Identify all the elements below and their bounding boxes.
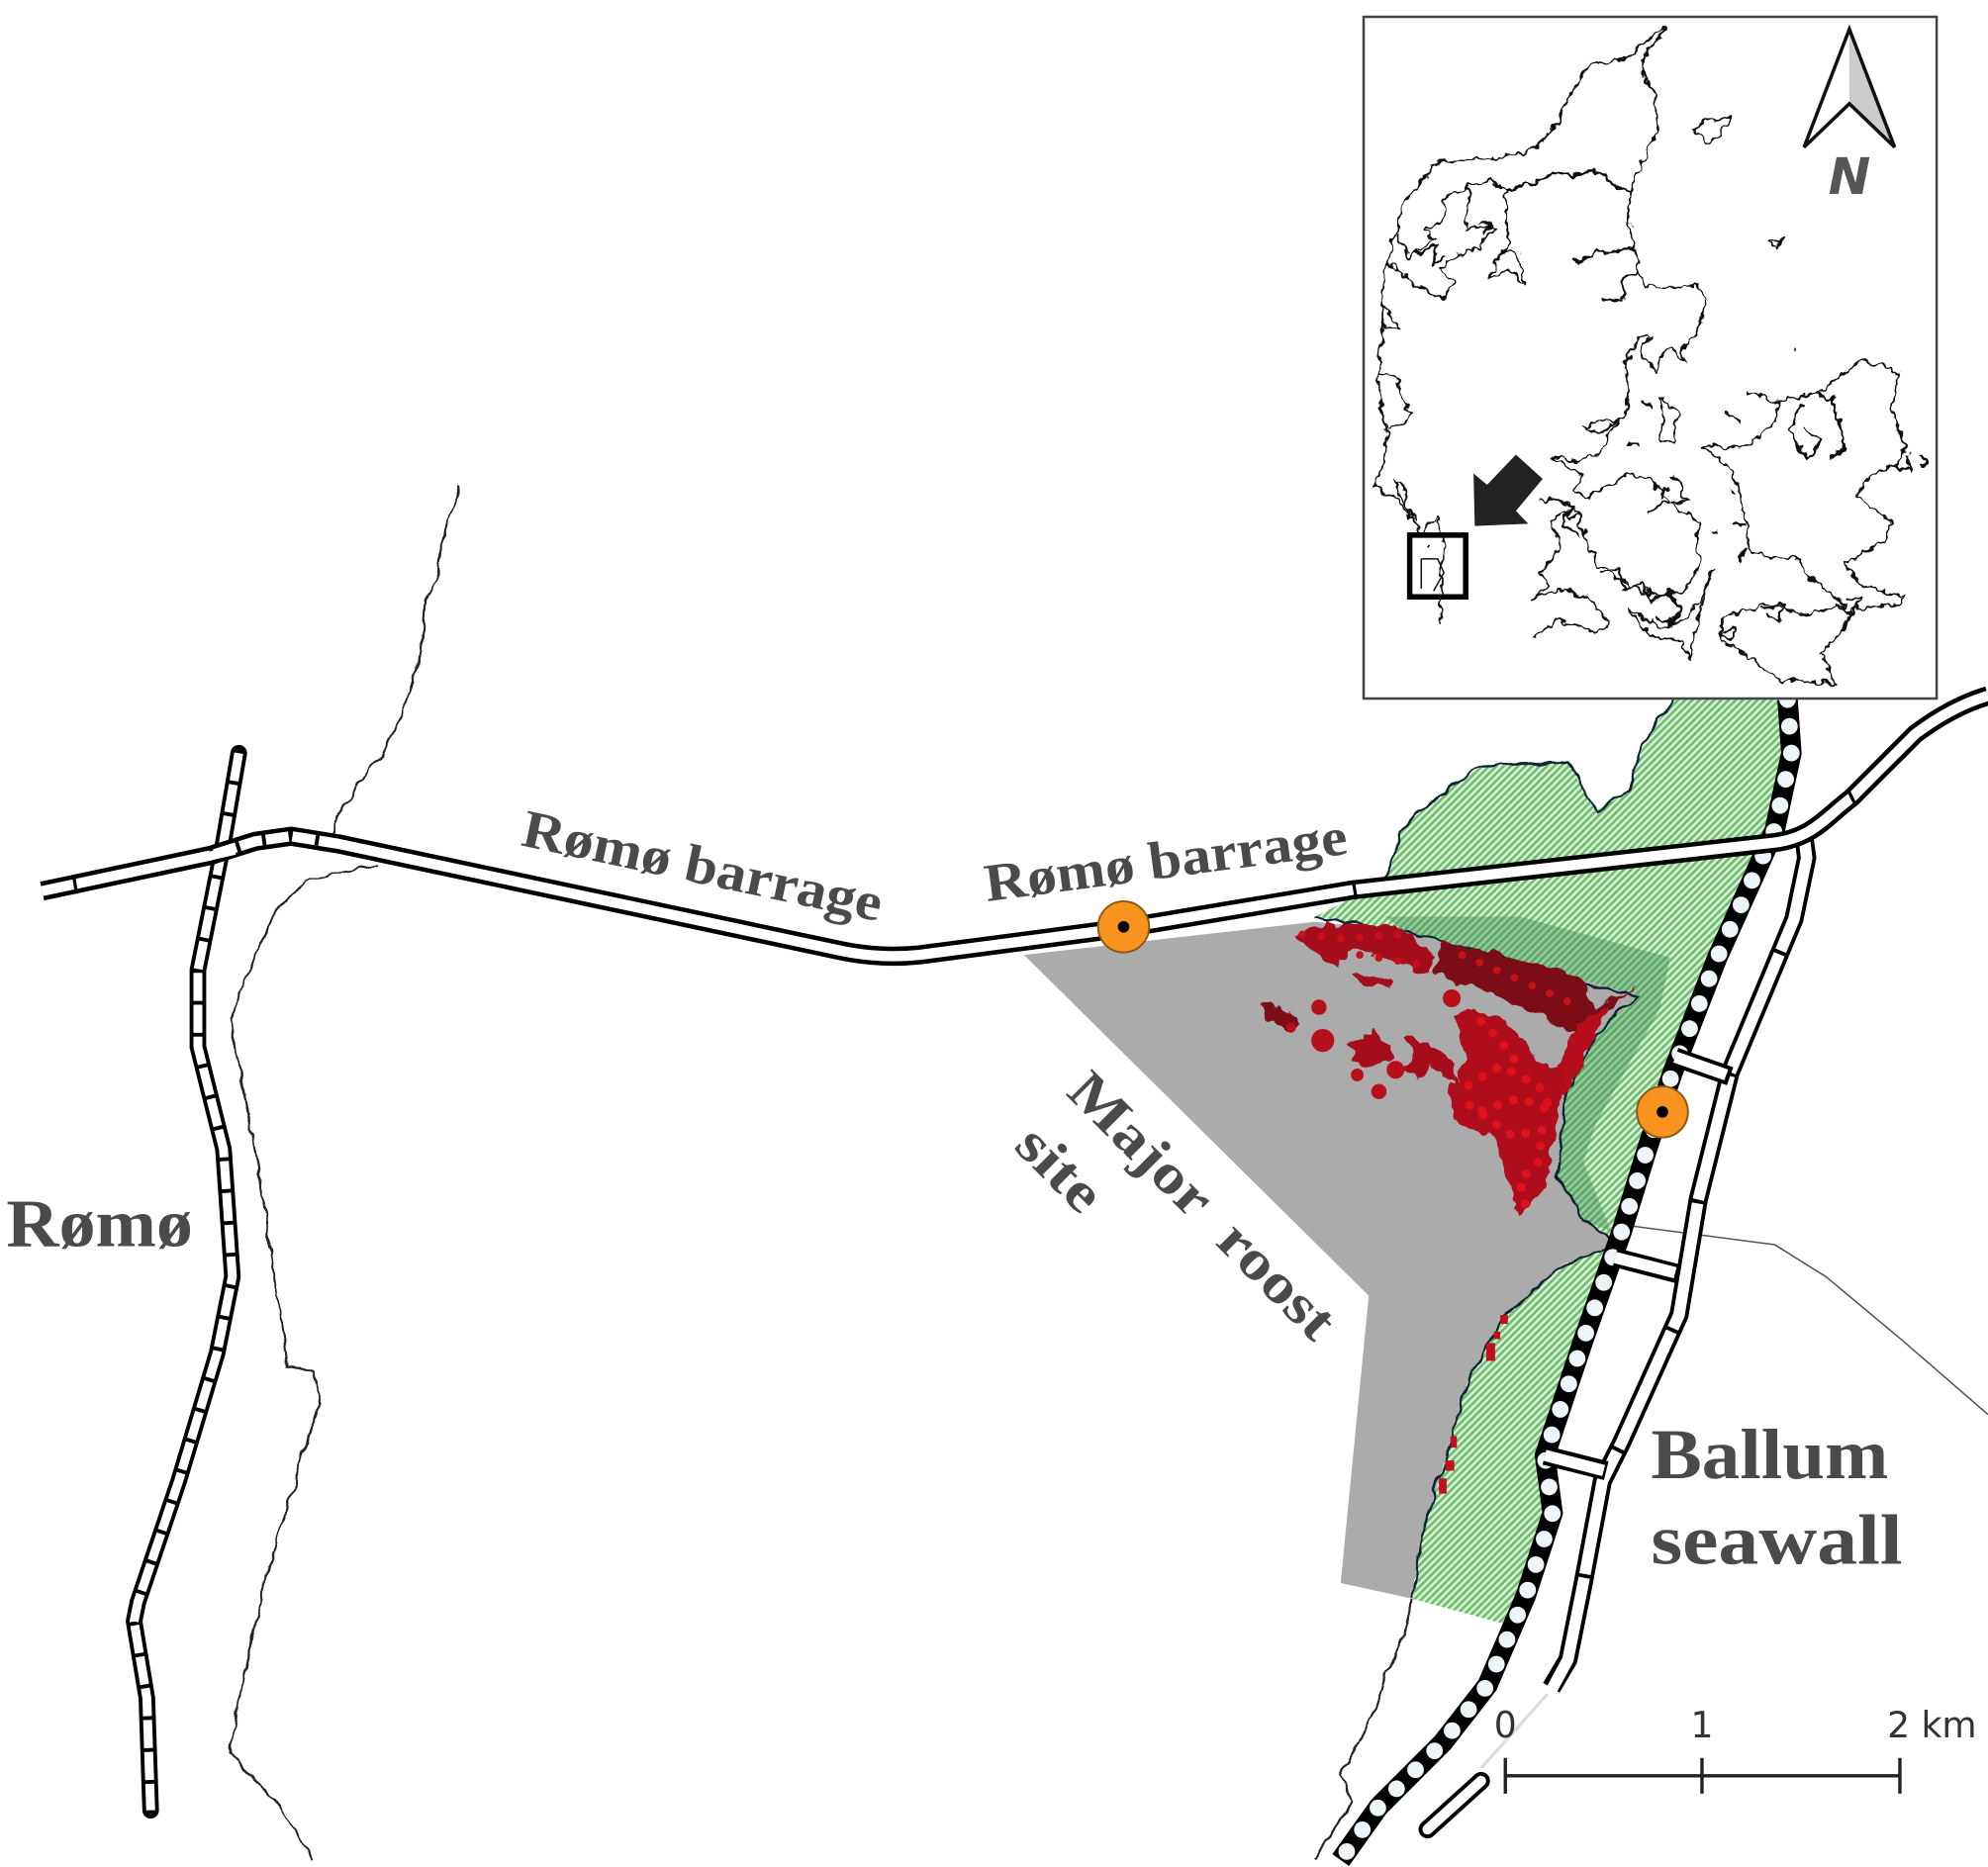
road crossing [202,850,235,858]
locator arrow [1473,455,1543,526]
scale bar: 0 [1494,1704,1517,1746]
north label: N [1829,148,1870,207]
Rømø detail inside locator [1421,545,1444,591]
darker marsh zone [1385,916,1670,1232]
scale bar: 1 [1690,1704,1713,1746]
coastline: Rømø north [334,485,460,835]
label: Ballum seawall [1651,1415,1903,1580]
label: Rømø barrage west: Rømø barrage [518,798,888,933]
inset map of Denmark [1364,17,1937,699]
north arrow [1804,29,1895,147]
label: Ballum seawall: seawall [1651,1501,1903,1580]
Ballum seawall road [1428,827,1807,1829]
major roost site polygon [1024,922,1637,1598]
main map [6,485,1988,1860]
locator square [1410,535,1466,597]
Rømø barrage road [43,696,1988,956]
scale bar [1494,1704,1977,1794]
coastline: Rømø south [230,865,377,1860]
green hatched marsh [1315,700,1787,1624]
orange marker: seawall [1637,1086,1688,1138]
Rømø north-south road [134,753,238,1811]
red points along the southern marsh [1439,1315,1508,1494]
coastline: mainland east [1564,1215,1988,1415]
Denmark coastlines [1373,29,1928,685]
coastline: mainland south [1315,1598,1411,1860]
label: Major roost: Major roost [1056,1059,1349,1353]
orange marker: barrage [1098,901,1149,953]
label: site: site [1003,1113,1116,1226]
label: Rømø barrage east: Rømø barrage [981,806,1351,913]
railway on the seawall [1341,700,1791,1860]
marsh edge line [1315,700,1672,1598]
label: Ballum seawall: Ballum [1651,1415,1888,1494]
red observation points [1262,923,1636,1215]
scale bar: 2 km [1887,1704,1977,1746]
label: Rømø: Rømø [6,1185,193,1260]
